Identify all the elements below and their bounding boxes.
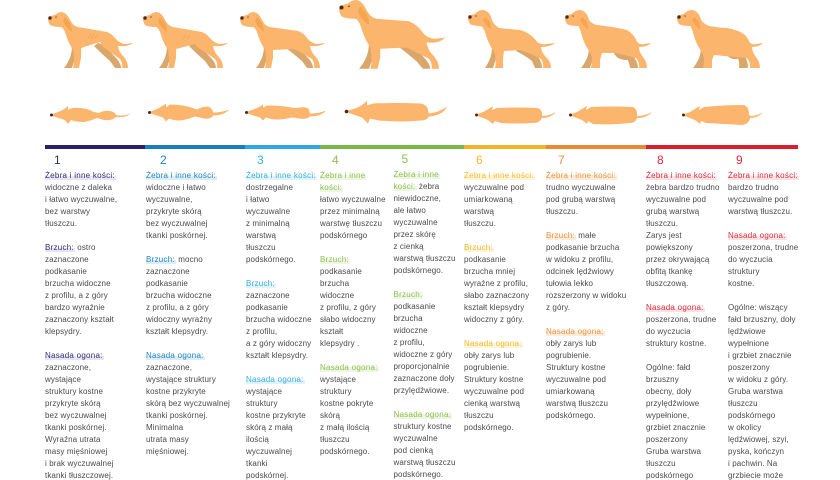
panel: column 9: 9 [736, 153, 743, 167]
panel: column 5 [394, 152, 456, 479]
panel: column 4: z profilu, z góry [320, 303, 376, 312]
panel: column 9: i grzbiet znacznie [728, 351, 792, 360]
panel: column 1: tkanki poskórnej. [45, 423, 107, 432]
panel: column 1: podkasanie [45, 267, 87, 276]
panel: column 2: brzucha widoczne [146, 291, 212, 300]
panel: column 2: z profilu, a z góry [146, 303, 209, 312]
panel: column 2: kostne przykryte [146, 387, 206, 396]
panel: column 2: Nasada ogona: [146, 351, 204, 360]
panel: column 6: podskórnego. [464, 423, 514, 432]
panel: column 3: kostne przykryte [246, 411, 306, 420]
panel: column 1: masy mięśniowej [45, 447, 107, 456]
panel: column 6: Brzuch: [464, 243, 493, 252]
panel: column 5: pod cienką [394, 446, 433, 455]
panel: column 2: zaznaczone [146, 267, 190, 276]
panel: column 4: struktury [320, 387, 352, 396]
panel: column 8: do wyczucia [646, 327, 691, 336]
panel: column 1: i brak wyczuwalnej [45, 459, 114, 468]
panel: column 2: 2 [160, 153, 167, 167]
panel: column 3: z minimalną [246, 219, 290, 228]
panel: column 5: wyczuwalne [394, 434, 438, 443]
panel: column 1: 1 [54, 153, 61, 167]
panel: column 1: struktury kostne [45, 387, 103, 396]
panel: column 1: Brzuch: ostro [45, 243, 96, 252]
panel: column 3: struktury [246, 399, 278, 408]
panel: column 7: tułowia lekko [546, 279, 593, 288]
panel: column 8: podskórnego [646, 471, 693, 480]
panel: column 1: tkanki tłuszczowej. [45, 471, 113, 480]
panel: column 6: brzucha mniej [464, 267, 515, 276]
panel: column 9: Nasada ogona: [728, 231, 786, 240]
panel: column 4: widoczne [320, 291, 354, 300]
panel: column 4: Żebra i inne [320, 171, 365, 180]
panel: column 1: zaznaczone, [45, 363, 91, 372]
panel: column 9: kostne. [728, 279, 754, 288]
panel: column 3: podskórnego. [246, 255, 296, 264]
panel: column 4: brzucha [320, 279, 349, 288]
panel: column 5: widoczne [394, 326, 428, 335]
panel: column 9: lędźwiowej, szyi, [728, 435, 789, 444]
panel: column 1 [45, 153, 117, 480]
panel: column 9: poszerzony [728, 363, 770, 372]
panel: column 6: 6 [476, 153, 483, 167]
panel: column 5: z cienką [394, 242, 424, 251]
panel: column 6: wyczuwalne pod [464, 387, 524, 396]
panel: column 6: Nasada ogona: [464, 339, 522, 348]
panel: column 5: kości: żebra [394, 182, 439, 191]
panel: column 4: z małą ilością [320, 423, 369, 432]
panel: column 7: w widoku z profilu, [546, 255, 613, 264]
dog 2 top view [148, 104, 229, 122]
panel: column 6: Żebra i inne kości: [464, 171, 534, 180]
panel: column 6: tłuszczu [464, 411, 494, 420]
panel: column 9: warstwą tłuszczu. [728, 207, 792, 216]
panel: column 2: skórą bez wyczuwalnej [146, 399, 230, 408]
panel: column 2: Brzuch: mocno [146, 255, 203, 264]
panel: column 6: obły zarys lub [464, 351, 514, 360]
panel: column 3: wystające [246, 387, 282, 396]
panel: column 2: wyczuwalne, [146, 195, 192, 204]
panel: column 7: trudno wyczuwalne [546, 183, 616, 192]
panel: column 9: poszerzona, trudne [728, 243, 798, 252]
panel: column 5: widoczne z góry [394, 350, 452, 359]
panel: column 9: wypełnione [728, 339, 769, 348]
panel: column 8: poszerzony [646, 435, 688, 444]
panel: column 9: podskórnego [728, 411, 775, 420]
panel: column 9: Gruba warstwa [728, 387, 783, 396]
panel: column 3: ilością [246, 435, 269, 444]
panel: column 6: cienką warstwą [464, 399, 520, 408]
panel: column 5: podkasanie [394, 302, 435, 311]
panel: column 6: warstwą [464, 207, 494, 216]
panel: column 9: tłuszczu [728, 399, 758, 408]
panel: column 7: Struktury kostne [546, 363, 605, 372]
panel: column 6: widoczny z góry. [464, 315, 524, 324]
panel: column 1: Nasada ogona: [45, 351, 103, 360]
panel: column 2 [146, 153, 230, 456]
panel: column 3: z profilu, [246, 327, 277, 336]
panel: column 4: łatwo wyczuwalne [320, 195, 386, 204]
dog 3 top view [245, 104, 326, 120]
panel: column 1: przykryte skórą [45, 399, 101, 408]
panel: column 3: skórą z małą [246, 423, 293, 432]
panel: column 3: wyczuwalne [246, 207, 290, 216]
panel: column 3: dostrzegalne [246, 183, 293, 192]
panel: column 2: tkanki poskórnej. [146, 411, 208, 420]
panel: column 3: brzucha widoczne [246, 315, 312, 324]
panel: column 4: kostne pokryte [320, 399, 373, 408]
panel: column 8: tłuszczową. [646, 279, 688, 288]
dog 5 top view [475, 106, 556, 124]
panel: column 3: tłuszczu [246, 243, 276, 252]
panel: column 5: podskórnego. [394, 266, 443, 275]
panel: column 7: Żebra i inne kości: [546, 171, 616, 180]
panel: column 5: proporcjonalnie [394, 362, 450, 371]
panel: column 4: kości: [320, 183, 342, 192]
panel: column 3: a z góry widoczny [246, 339, 311, 348]
panel: column 7: obły zarys lub [546, 339, 596, 348]
panel: column 3: Brzuch: [246, 279, 275, 288]
panel: column 8: poszerzona, trudne [646, 315, 716, 324]
panel: column 1: bardzo wyraźnie [45, 303, 105, 312]
panel: column 9: w widoku z góry. [728, 375, 788, 384]
panel: column 4: warstwę tłuszczu [320, 219, 382, 228]
panel: column 6: tłuszczu. [464, 219, 496, 228]
panel: column 1: widoczne z daleka [45, 183, 112, 192]
colour scale bar [45, 145, 798, 149]
panel: column 8: Żebra i inne kości: [646, 171, 716, 180]
panel: column 6: Struktury kostne [464, 375, 523, 384]
panel: column 9: grzbiecie może [728, 471, 783, 480]
panel: column 8: Ogólne: fałd [646, 363, 690, 372]
panel: column 5: przylędźwiowe. [394, 386, 449, 395]
panel: column 8: wypełnione, [646, 411, 689, 420]
panel: column 9 [728, 153, 799, 480]
panel: column 3: podskórnej. [246, 471, 288, 480]
panel: column 8: Gruba warstwa [646, 447, 701, 456]
dog 2 side view [143, 12, 228, 68]
panel: column 5: Nasada ogona: [394, 410, 451, 419]
panel: column 7: pogrubienie. [546, 351, 591, 360]
dog 6 top view [569, 106, 652, 124]
panel: column 8: obecny, doły [646, 387, 692, 396]
panel: column 9: w okolicy [728, 423, 761, 432]
panel: column 4: Nasada ogona: [320, 363, 378, 372]
panel: column 3: Nasada ogona: [246, 375, 304, 384]
panel: column 4: tłuszczu [320, 435, 350, 444]
panel: column 6: kształt klepsydry [464, 303, 524, 312]
panel: column 4: podskórnego [320, 231, 367, 240]
panel: column 7: pod grubą warstwą [546, 195, 615, 204]
dog 6 side view [565, 10, 651, 68]
panel: column 2: mięśniowej. [146, 447, 189, 456]
panel: column 2: tkanki poskórnej. [146, 231, 208, 240]
panel: column 2: bez wyczuwalnej [146, 219, 208, 228]
panel: column 8: przez okrywającą [646, 255, 709, 264]
panel: column 4: podkasanie [320, 267, 362, 276]
panel: column 6: słabo zaznaczony [464, 291, 529, 300]
panel: column 5: zaznaczone doły [394, 374, 455, 383]
panel: column 5: Żebra i inne [394, 170, 439, 179]
panel: column 3: tkanki [246, 459, 268, 468]
dog 1 top view [50, 106, 131, 124]
panel: column 4: klepsydry . [320, 339, 359, 348]
panel: column 7: z góry. [546, 303, 570, 312]
dog 3 side view [240, 12, 325, 68]
panel: column 4: skórą [320, 411, 340, 420]
panel: column 3: warstwą [246, 231, 276, 240]
panel: column 6: wyraźne z profilu, [464, 279, 528, 288]
panel: column 1: Żebra i inne kości: [45, 171, 115, 180]
panel: column 2: kształt klepsydry. [146, 327, 208, 336]
panel: column 3: wyczuwalnej [246, 447, 292, 456]
panel: column 9: do wyczucia [728, 255, 773, 264]
panel: column 8: 8 [657, 153, 664, 167]
panel: column 4 [320, 153, 386, 456]
panel: column 8: tłuszczu [646, 459, 676, 468]
panel: column 7: 7 [558, 153, 565, 167]
panel: column 9: Ogólne: wiszący [728, 303, 788, 312]
panel: column 8: struktury kostne. [646, 339, 706, 348]
panel: column 8: tłuszczu. [646, 219, 678, 228]
panel: column 5: niewidoczne, [394, 194, 441, 203]
panel: column 2: wystające struktury [146, 375, 216, 384]
panel: column 8 [646, 153, 720, 480]
panel: column 8: przylędźwiowe [646, 399, 699, 408]
panel: column 4: 4 [332, 153, 339, 167]
panel: column 3 [246, 153, 317, 480]
panel: column 1: zaznaczony kształt [45, 315, 114, 324]
panel: column 3: podkasanie [246, 303, 288, 312]
panel: column 5: struktury kostne [394, 422, 452, 431]
panel: column 4: Brzuch: [320, 255, 349, 264]
panel: column 6: umiarkowaną [464, 195, 513, 204]
panel: column 3: Żebra i inne kości: [246, 171, 316, 180]
panel: column 1: tłuszczu. [45, 219, 77, 228]
panel: column 9: pyska, kończyn [728, 447, 784, 456]
panel: column 2: podkasanie [146, 279, 188, 288]
panel: column 2: widoczny wyraźny [146, 315, 212, 324]
panel: column 7: odcinek lędźwiowy [546, 267, 614, 276]
panel: column 4: przez minimalną [320, 207, 380, 216]
panel: column 2: widoczne i łatwo [146, 183, 206, 192]
dog 4 side view [339, 0, 445, 69]
panel: column 4: wystające [320, 375, 356, 384]
panel: column 5: ale łatwo [394, 206, 426, 215]
panel: column 7: Nasada ogona: [546, 327, 604, 336]
panel: column 5: warstwą tłuszczu [394, 458, 456, 467]
panel: column 9: bardzo trudno [728, 183, 779, 192]
panel: column 5: 5 [402, 152, 408, 166]
panel: column 8: Nasada ogona: [646, 303, 704, 312]
panel: column 5: brzucha [394, 314, 423, 323]
dog 4 top view [345, 100, 447, 124]
panel: column 1: Wyraźna utrata [45, 435, 101, 444]
panel: column 7: podkasanie brzucha [546, 243, 619, 252]
panel: column 2: przykryte skórą [146, 207, 202, 216]
panel: column 8: powiększony [646, 243, 693, 252]
panel: column 2: Żebra i inne kości: [146, 171, 216, 180]
panel: column 5: podskórnego. [394, 470, 443, 479]
panel: column 5: przez skórę [394, 230, 436, 239]
panel: column 2: Minimalna [146, 423, 183, 432]
panel: column 7 [546, 153, 626, 420]
panel: column 1: bez warstwy [45, 207, 90, 216]
panel: column 5: Brzuch: [394, 290, 422, 299]
panel: column 9: Żebra i inne kości: [728, 171, 798, 180]
panel: column 7: warstwą tłuszczu [546, 399, 608, 408]
panel: column 1: brzucha widoczne [45, 279, 111, 288]
panel: column 3: i łatwo [246, 195, 269, 204]
panel: column 3: 3 [257, 153, 264, 167]
panel: column 1: i łatwo wyczuwalne, [45, 195, 117, 204]
panel: column 4: słabo widoczny [320, 315, 376, 324]
panel: column 6: podkasanie [464, 255, 506, 264]
panel: column 2: zaznaczone, [146, 363, 192, 372]
panel: column 8: Zarys jest [646, 231, 682, 240]
dog 5 side view [468, 10, 555, 68]
panel: column 7: rozszerzony w widoku [546, 291, 626, 300]
panel: column 3: zaznaczone [246, 291, 290, 300]
panel: column 8: żebra bardzo trudno [646, 183, 720, 192]
panel: column 3: kształt klepsydry. [246, 351, 308, 360]
dog 7 top view [682, 105, 763, 125]
panel: column 7: Brzuch: małe [546, 231, 596, 240]
panel: column 8: grzbiet znacznie [646, 423, 705, 432]
panel: column 1: wystające [45, 375, 81, 384]
panel: column 7: tłuszczu. [546, 207, 578, 216]
panel: column 4: podskórnego. [320, 447, 370, 456]
panel: column 7: wyczuwalne pod [546, 375, 606, 384]
panel: column 4: kształt [320, 327, 343, 336]
panel: column 9: i pachwin. Na [728, 459, 777, 468]
panel: column 8: brzuszny [646, 375, 679, 384]
panel: column 1: klepsydry. [45, 327, 81, 336]
dog 1 side view [48, 12, 133, 68]
panel: column 7: podskórnego. [546, 411, 596, 420]
panel: column 8: obfitą tkankę [646, 267, 693, 276]
panel: column 1: bez wyczuwalnej [45, 411, 107, 420]
panel: column 8: wyczuwalne pod [646, 195, 706, 204]
panel: column 1: zaznaczone [45, 255, 89, 264]
panel: column 6: wyczuwalne pod [464, 183, 524, 192]
dogs illustration: side and top views [48, 0, 763, 125]
panel: column 6 [464, 153, 535, 432]
panel: column 1: z profilu, a z góry [45, 291, 108, 300]
panel: column 2: utrata masy [146, 435, 189, 444]
panel: column 9: fałd brzuszny, doły [728, 315, 796, 324]
panel: column 9: lędźwiowe [728, 327, 766, 336]
dog 7 side view [677, 10, 763, 68]
panel: column 5: wyczuwalne [394, 218, 438, 227]
panel: column 5: z profilu, [394, 338, 425, 347]
panel: column 9: struktury [728, 267, 760, 276]
panel: column 6: pogrubienie. [464, 363, 509, 372]
panel: column 8: grubą warstwą [646, 207, 699, 216]
panel: column 7: umiarkowaną [546, 387, 595, 396]
panel: column 5: warstwą tłuszczu [394, 254, 456, 263]
panel: column 9: wyczuwalne pod [728, 195, 788, 204]
